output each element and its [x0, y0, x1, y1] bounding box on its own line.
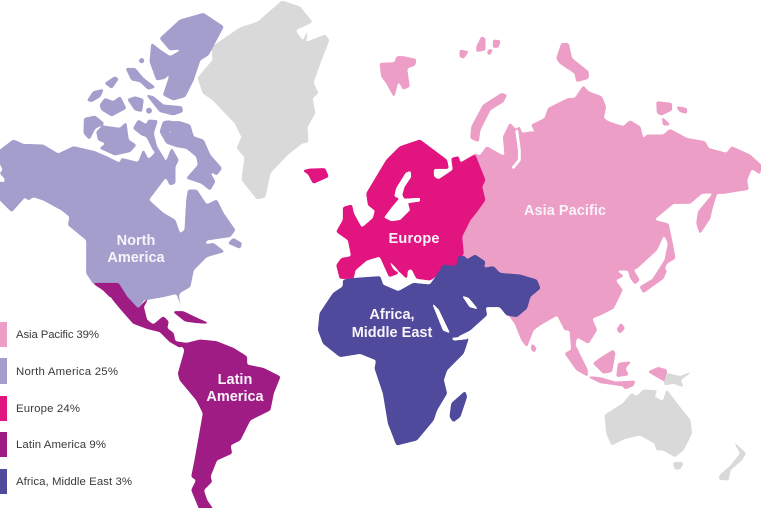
region: North America — [0, 13, 242, 309]
Persian Gulf — [463, 297, 477, 308]
Gulf of California — [107, 297, 122, 313]
legend item: Europe — [0, 396, 80, 421]
Gulf of Aden — [453, 337, 468, 340]
inland seas and water cut-outs — [107, 130, 519, 340]
map label: Asia Pacific: Asia Pacific — [524, 203, 606, 219]
Ob river — [513, 130, 519, 168]
region: Latin America — [93, 283, 280, 508]
legend item: Europe: Europe 24% — [16, 403, 80, 415]
legend item: North America — [0, 358, 118, 384]
legend item: Latin America — [0, 432, 106, 457]
Russia, northern Asia and arctic islands — [460, 37, 761, 278]
Foxe Basin — [187, 159, 193, 165]
South and Southeast Asia with islands — [500, 270, 667, 389]
legend item: Africa, Middle East: Africa, Middle East 3% — [16, 476, 132, 488]
Cuba — [173, 312, 208, 323]
region: Europe — [303, 140, 485, 280]
legend item: North America: North America 25% — [16, 366, 118, 378]
Red Sea — [433, 305, 449, 332]
map label: North America: America — [107, 250, 166, 266]
Madagascar — [450, 392, 467, 422]
legend item: Asia Pacific — [0, 322, 99, 347]
United States south coast — [87, 270, 193, 309]
Iceland — [303, 169, 328, 183]
region: Africa and Middle East — [318, 255, 540, 445]
region: Australia, New Guinea and New Zealand — [605, 372, 746, 480]
legend item: Asia Pacific: Asia Pacific 39% — [16, 329, 99, 341]
Svalbard — [380, 57, 416, 97]
map label: Africa, Middle East: Africa, — [369, 307, 415, 323]
map label: North America: North — [117, 233, 155, 249]
North America arctic islands and mainland — [0, 13, 242, 293]
map label: Africa, Middle East: Middle East — [352, 325, 432, 341]
legend item: Latin America: Latin America 9% — [16, 439, 106, 451]
map label: Europe: Europe — [388, 231, 440, 247]
legend item: Africa, Middle East — [0, 469, 132, 494]
region: Asia Pacific — [380, 37, 761, 389]
map label: Latin America: America — [206, 389, 265, 405]
Baltic Sea — [385, 172, 419, 221]
region: Greenland — [198, 1, 329, 199]
legend — [0, 322, 132, 494]
map label: Latin America: Latin — [218, 372, 252, 388]
